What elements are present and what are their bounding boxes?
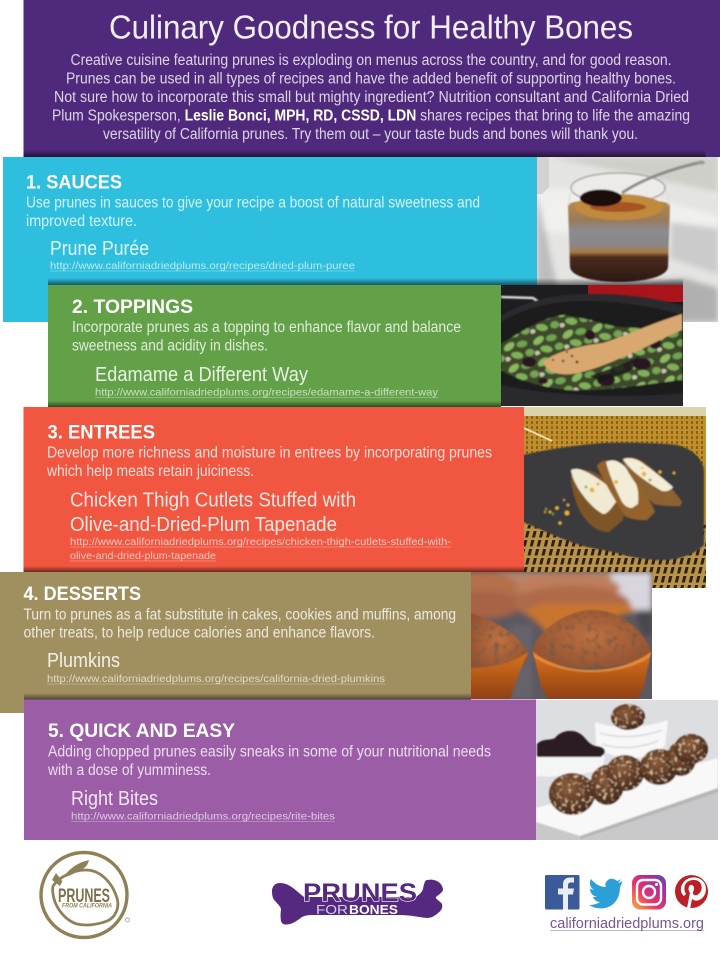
logo: prunes for bones: BONES: [349, 902, 398, 917]
description: sweetness and acidity in dishes.: [72, 338, 268, 354]
description: Incorporate prunes as a topping to enhance flavor and balance: [72, 319, 461, 336]
shadow under sauces: [48, 278, 683, 285]
description: [24, 606, 456, 642]
description: which help meats retain juiciness.: [46, 463, 254, 480]
logo: prunes for bones: FOR: [316, 903, 348, 917]
recipe link: [71, 788, 335, 822]
description: [26, 194, 480, 230]
icon: facebook: [545, 875, 580, 910]
photo: prune puree jar: [537, 157, 718, 322]
icon: twitter: [589, 879, 622, 908]
intro text: Plum Spokesperson, Leslie Bonci, MPH, RD, CSSD, LDN shares recipes that bring to life the amazing: [52, 108, 690, 124]
description: [72, 319, 461, 354]
description: with a dose of yumminess.: [47, 762, 211, 779]
recipe link: [70, 490, 452, 562]
heading: 2. TOPPINGS: [72, 296, 193, 318]
panel: sauces: [3, 157, 718, 322]
description: [47, 744, 491, 779]
recipe link: http://www.californiadriedplums.org/recipes/edamame-a-different-way: [95, 386, 439, 398]
panel: quick and easy: [24, 700, 718, 840]
recipe link: http://www.californiadriedplums.org/recipes/rite-bites: [71, 810, 335, 822]
logo: prunes from california: [41, 852, 130, 938]
logo: prunes for bones: PRUNES: [303, 879, 417, 907]
intro text: versatility of California prunes. Try them out – your taste buds and bones will thank you.: [103, 126, 638, 143]
photo: energy bites: [536, 700, 718, 840]
heading: 1. SAUCES: [26, 172, 122, 194]
photo: muffins: [471, 572, 652, 699]
website link: californiadriedplums.org: [550, 915, 704, 932]
recipe link: http://www.californiadriedplums.org/recipes/dried-plum-puree: [50, 260, 355, 272]
description: Develop more richness and moisture in entrees by incorporating prunes: [47, 444, 492, 462]
intro text: [52, 52, 690, 143]
shadow under toppings: [48, 401, 501, 407]
icon: pinterest: [675, 875, 708, 912]
panel: desserts: [0, 572, 652, 713]
recipe link: Prune Purée: [50, 238, 149, 260]
logo: prunes for bones: [272, 879, 443, 925]
description: Adding chopped prunes easily sneaks in some of your nutritional needs: [48, 744, 491, 760]
recipe link: [95, 364, 439, 398]
panel: entrees: [24, 407, 706, 588]
social icons: [545, 875, 708, 912]
heading: 3. ENTREES: [48, 422, 155, 444]
recipe link: Edamame a Different Way: [95, 364, 308, 386]
description: Use prunes in sauces to give your recipe a boost of natural sweetness and: [26, 194, 480, 212]
shadow under header: [24, 150, 706, 157]
recipe link: Plumkins: [47, 650, 120, 672]
photo: edamame pan: [501, 285, 683, 406]
logo: prunes from california: PRUNES: [58, 886, 110, 907]
description: Turn to prunes as a fat substitute in cakes, cookies and muffins, among: [24, 606, 456, 624]
photo: chicken cutlets on dark plate: [523, 407, 706, 588]
shadow under desserts: [24, 693, 471, 700]
recipe link: Olive-and-Dried-Plum Tapenade: [70, 514, 337, 536]
recipe link: http://www.californiadriedplums.org/recipes/california-dried-plumkins: [47, 673, 385, 685]
recipe link: olive-and-dried-plum-tapenade: [70, 550, 216, 562]
panel: toppings: [48, 285, 683, 407]
description: [46, 444, 492, 480]
icon: instagram: [632, 875, 666, 910]
shadow under entrees: [24, 566, 524, 572]
intro text: Creative cuisine featuring prunes is exploding on menus across the country, and for good reason.: [70, 52, 672, 69]
recipe link: [50, 238, 355, 272]
logo: prunes from california: FROM CALIFORNIA: [62, 902, 112, 910]
header panel: [24, 0, 720, 157]
recipe link: [47, 650, 385, 685]
description: improved texture.: [26, 213, 137, 230]
recipe link: http://www.californiadriedplums.org/recipes/chicken-thigh-cutlets-stuffed-with-: [70, 536, 452, 548]
heading: 5. QUICK AND EASY: [48, 720, 235, 742]
description: other treats, to help reduce calories and enhance flavors.: [24, 624, 375, 642]
title: Culinary Goodness for Healthy Bones: [109, 8, 633, 46]
recipe link: Right Bites: [71, 788, 158, 810]
recipe link: Chicken Thigh Cutlets Stuffed with: [70, 490, 356, 512]
heading: 4. DESSERTS: [24, 583, 141, 605]
